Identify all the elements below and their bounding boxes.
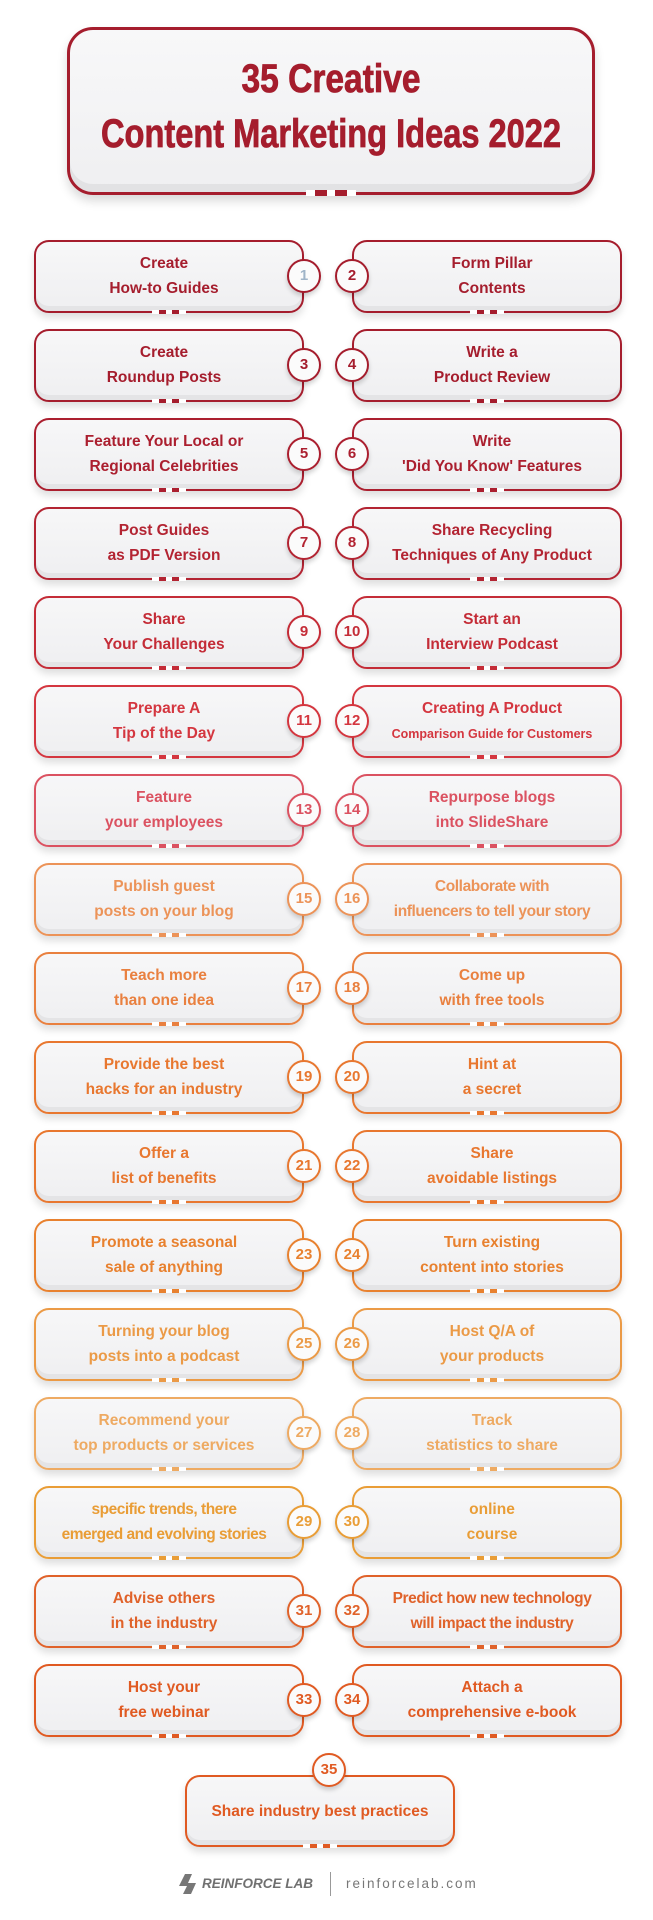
row 15 <box>32 1486 624 1566</box>
badge 3 <box>287 348 321 382</box>
card 22: avoidable listings <box>427 1170 557 1187</box>
card 21 <box>34 1130 304 1203</box>
badge 34: 34 <box>344 1691 360 1708</box>
badge 23 <box>287 1238 321 1272</box>
card 1: Create <box>140 255 188 272</box>
row 10 <box>32 1041 624 1122</box>
badge 4 <box>335 348 369 382</box>
badge 2: 2 <box>348 267 356 284</box>
card 25 <box>34 1308 304 1381</box>
card 2 <box>352 240 622 313</box>
card 33: Host your <box>128 1679 200 1696</box>
badge 32: 32 <box>344 1602 360 1619</box>
card 35: Share industry best practices <box>211 1803 429 1820</box>
card 18: with free tools <box>439 992 545 1009</box>
badge 33 <box>287 1683 321 1717</box>
card 19: hacks for an industry <box>86 1081 242 1098</box>
row 9 <box>32 952 624 1032</box>
card 28: statistics to share <box>426 1437 558 1454</box>
badge 7 <box>287 526 321 560</box>
row 8 <box>32 863 624 944</box>
row 17 <box>32 1664 624 1744</box>
card 13: Feature <box>136 789 192 806</box>
card 25: Turning your blog <box>98 1323 230 1340</box>
card 1 <box>34 240 304 313</box>
card 12 <box>352 685 622 758</box>
row 3 <box>32 418 624 498</box>
brand name: REINFORCE LAB <box>202 1876 313 1891</box>
badge 24: 24 <box>344 1246 360 1263</box>
card 28 <box>352 1397 622 1470</box>
card 20: Hint at <box>468 1056 516 1073</box>
card 10 <box>352 596 622 669</box>
card 30: online <box>469 1501 515 1518</box>
card 6: 'Did You Know' Features <box>402 458 582 475</box>
row 14 <box>32 1397 624 1478</box>
badge 3: 3 <box>300 356 308 373</box>
card 24 <box>352 1219 622 1292</box>
badge 4: 4 <box>348 356 356 373</box>
card 27: top products or services <box>74 1437 254 1454</box>
badge 1 <box>287 259 321 293</box>
card 28: Track <box>472 1412 512 1429</box>
card 6: Write <box>473 433 511 450</box>
badge 26: 26 <box>344 1335 360 1352</box>
badge 34 <box>335 1683 369 1717</box>
card 15: posts on your blog <box>94 903 234 920</box>
badge 18 <box>335 971 369 1005</box>
card 31: in the industry <box>111 1615 217 1632</box>
badge 23: 23 <box>296 1246 312 1263</box>
badge 22 <box>335 1149 369 1183</box>
card 13 <box>34 774 304 847</box>
badge 30 <box>335 1505 369 1539</box>
card 15 <box>34 863 304 936</box>
title: 35 Creative <box>242 57 420 101</box>
badge 5: 5 <box>300 445 308 462</box>
card 31: Advise others <box>113 1590 215 1607</box>
badge 8: 8 <box>348 534 356 551</box>
card 17: than one idea <box>114 992 214 1009</box>
badge 29 <box>287 1505 321 1539</box>
card 34: comprehensive e-book <box>408 1704 576 1721</box>
card 23: Promote a seasonal <box>91 1234 237 1251</box>
url: reinforcelab.com <box>346 1876 478 1891</box>
card 9 <box>34 596 304 669</box>
card 7 <box>34 507 304 580</box>
badge 20: 20 <box>344 1068 360 1085</box>
card 26: Host Q/A of <box>450 1323 534 1340</box>
card 19: Provide the best <box>104 1056 224 1073</box>
card 4: Product Review <box>434 369 550 386</box>
card 11: Prepare A <box>128 700 200 717</box>
row 16 <box>32 1575 624 1656</box>
badge 19 <box>287 1060 321 1094</box>
badge 15: 15 <box>296 890 312 907</box>
card 8: Techniques of Any Product <box>392 547 592 564</box>
card 9: Your Challenges <box>103 636 225 653</box>
card 16: influencers to tell your story <box>394 903 590 920</box>
card 2: Contents <box>458 280 526 297</box>
badge 10 <box>335 615 369 649</box>
card 19 <box>34 1041 304 1114</box>
row 12 <box>32 1219 624 1300</box>
card 35 <box>182 1753 458 1854</box>
card 7: Post Guides <box>119 522 209 539</box>
card 30: course <box>467 1526 517 1543</box>
card 16 <box>352 863 622 936</box>
card 27 <box>34 1397 304 1470</box>
badge 11 <box>287 704 321 738</box>
badge 14: 14 <box>344 801 360 818</box>
card 20: a secret <box>463 1081 521 1098</box>
badge 9: 9 <box>300 623 308 640</box>
row 5 <box>32 596 624 676</box>
card 24: content into stories <box>420 1259 564 1276</box>
badge 27: 27 <box>296 1424 312 1441</box>
badge 19: 19 <box>296 1068 312 1085</box>
card 16: Collaborate with <box>435 878 549 895</box>
badge 21 <box>287 1149 321 1183</box>
title <box>67 27 595 195</box>
row 13 <box>32 1308 624 1388</box>
badge 9 <box>287 615 321 649</box>
card 17: Teach more <box>121 967 207 984</box>
badge 25: 25 <box>296 1335 312 1352</box>
card 33: free webinar <box>118 1704 210 1721</box>
badge 35: 35 <box>321 1761 337 1778</box>
badge 28 <box>335 1416 369 1450</box>
card 11: Tip of the Day <box>113 725 215 742</box>
card 34: Attach a <box>461 1679 523 1696</box>
card 32: will impact the industry <box>411 1615 573 1632</box>
row 2 <box>32 329 624 410</box>
card 29 <box>34 1486 304 1559</box>
badge 17 <box>287 971 321 1005</box>
badge 2 <box>335 259 369 293</box>
card 29: emerged and evolving stories <box>62 1526 266 1543</box>
card 12: Creating A Product <box>422 700 562 717</box>
badge 28: 28 <box>344 1424 360 1441</box>
row 1 <box>32 240 624 320</box>
card 4 <box>352 329 622 402</box>
card 33 <box>34 1664 304 1737</box>
badge 13 <box>287 793 321 827</box>
card 5: Regional Celebrities <box>89 458 238 475</box>
card 18: Come up <box>459 967 525 984</box>
row 4 <box>32 507 624 588</box>
card 5: Feature Your Local or <box>85 433 243 450</box>
card 15: Publish guest <box>113 878 215 895</box>
card 17 <box>34 952 304 1025</box>
card 21: list of benefits <box>111 1170 217 1187</box>
badge 29: 29 <box>296 1513 312 1530</box>
badge 10: 10 <box>344 623 360 640</box>
badge 16: 16 <box>344 890 360 907</box>
card 7: as PDF Version <box>108 547 220 564</box>
badge 32 <box>335 1594 369 1628</box>
card 23: sale of anything <box>105 1259 223 1276</box>
badge 27 <box>287 1416 321 1450</box>
badge 12 <box>335 704 369 738</box>
card 34 <box>352 1664 622 1737</box>
card 10: Interview Podcast <box>426 636 558 653</box>
badge 25 <box>287 1327 321 1361</box>
icon: logo mark <box>179 1874 196 1894</box>
card 26 <box>352 1308 622 1381</box>
card 11 <box>34 685 304 758</box>
badge 7: 7 <box>300 534 308 551</box>
badge 30: 30 <box>344 1513 360 1530</box>
row 6 <box>32 685 624 766</box>
card 30 <box>352 1486 622 1559</box>
card 22: Share <box>470 1145 514 1162</box>
card 23 <box>34 1219 304 1292</box>
card 3: Create <box>140 344 188 361</box>
card 31 <box>34 1575 304 1648</box>
card 22 <box>352 1130 622 1203</box>
card 4: Write a <box>466 344 518 361</box>
badge 11: 11 <box>296 712 312 729</box>
card 20 <box>352 1041 622 1114</box>
badge 21: 21 <box>296 1157 312 1174</box>
badge 6 <box>335 437 369 471</box>
card 24: Turn existing <box>444 1234 540 1251</box>
card 8 <box>352 507 622 580</box>
badge 12: 12 <box>344 712 360 729</box>
card 21: Offer a <box>139 1145 189 1162</box>
badge 15 <box>287 882 321 916</box>
badge 35 <box>312 1753 346 1787</box>
badge 13: 13 <box>296 801 312 818</box>
badge 24 <box>335 1238 369 1272</box>
card 32: Predict how new technology <box>393 1590 591 1607</box>
badge 22: 22 <box>344 1157 360 1174</box>
card 32 <box>352 1575 622 1648</box>
card 10: Start an <box>463 611 521 628</box>
card 13: your employees <box>105 814 223 831</box>
row 11 <box>32 1130 624 1210</box>
card 1: How-to Guides <box>109 280 219 297</box>
badge 17: 17 <box>296 979 312 996</box>
card 18 <box>352 952 622 1025</box>
badge 33: 33 <box>296 1691 312 1708</box>
card 14: Repurpose blogs <box>429 789 555 806</box>
badge 5 <box>287 437 321 471</box>
row 7 <box>32 774 624 854</box>
badge 14 <box>335 793 369 827</box>
card 26: your products <box>440 1348 544 1365</box>
badge 31 <box>287 1594 321 1628</box>
card 3 <box>34 329 304 402</box>
card 14: into SlideShare <box>436 814 548 831</box>
badge 8 <box>335 526 369 560</box>
badge 26 <box>335 1327 369 1361</box>
card 2: Form Pillar <box>452 255 532 272</box>
card 14 <box>352 774 622 847</box>
card 3: Roundup Posts <box>107 369 221 386</box>
card 12: Comparison Guide for Customers <box>392 727 592 741</box>
card 6 <box>352 418 622 491</box>
card 8: Share Recycling <box>432 522 552 539</box>
badge 16 <box>335 882 369 916</box>
card 27: Recommend your <box>99 1412 229 1429</box>
badge 20 <box>335 1060 369 1094</box>
card 9: Share <box>142 611 186 628</box>
footer logo <box>179 1872 478 1896</box>
card 29: specific trends, there <box>92 1501 236 1518</box>
card 25: posts into a podcast <box>89 1348 239 1365</box>
badge 1: 1 <box>300 267 308 284</box>
badge 6: 6 <box>348 445 356 462</box>
badge 18: 18 <box>344 979 360 996</box>
card 5 <box>34 418 304 491</box>
badge 31: 31 <box>296 1602 312 1619</box>
